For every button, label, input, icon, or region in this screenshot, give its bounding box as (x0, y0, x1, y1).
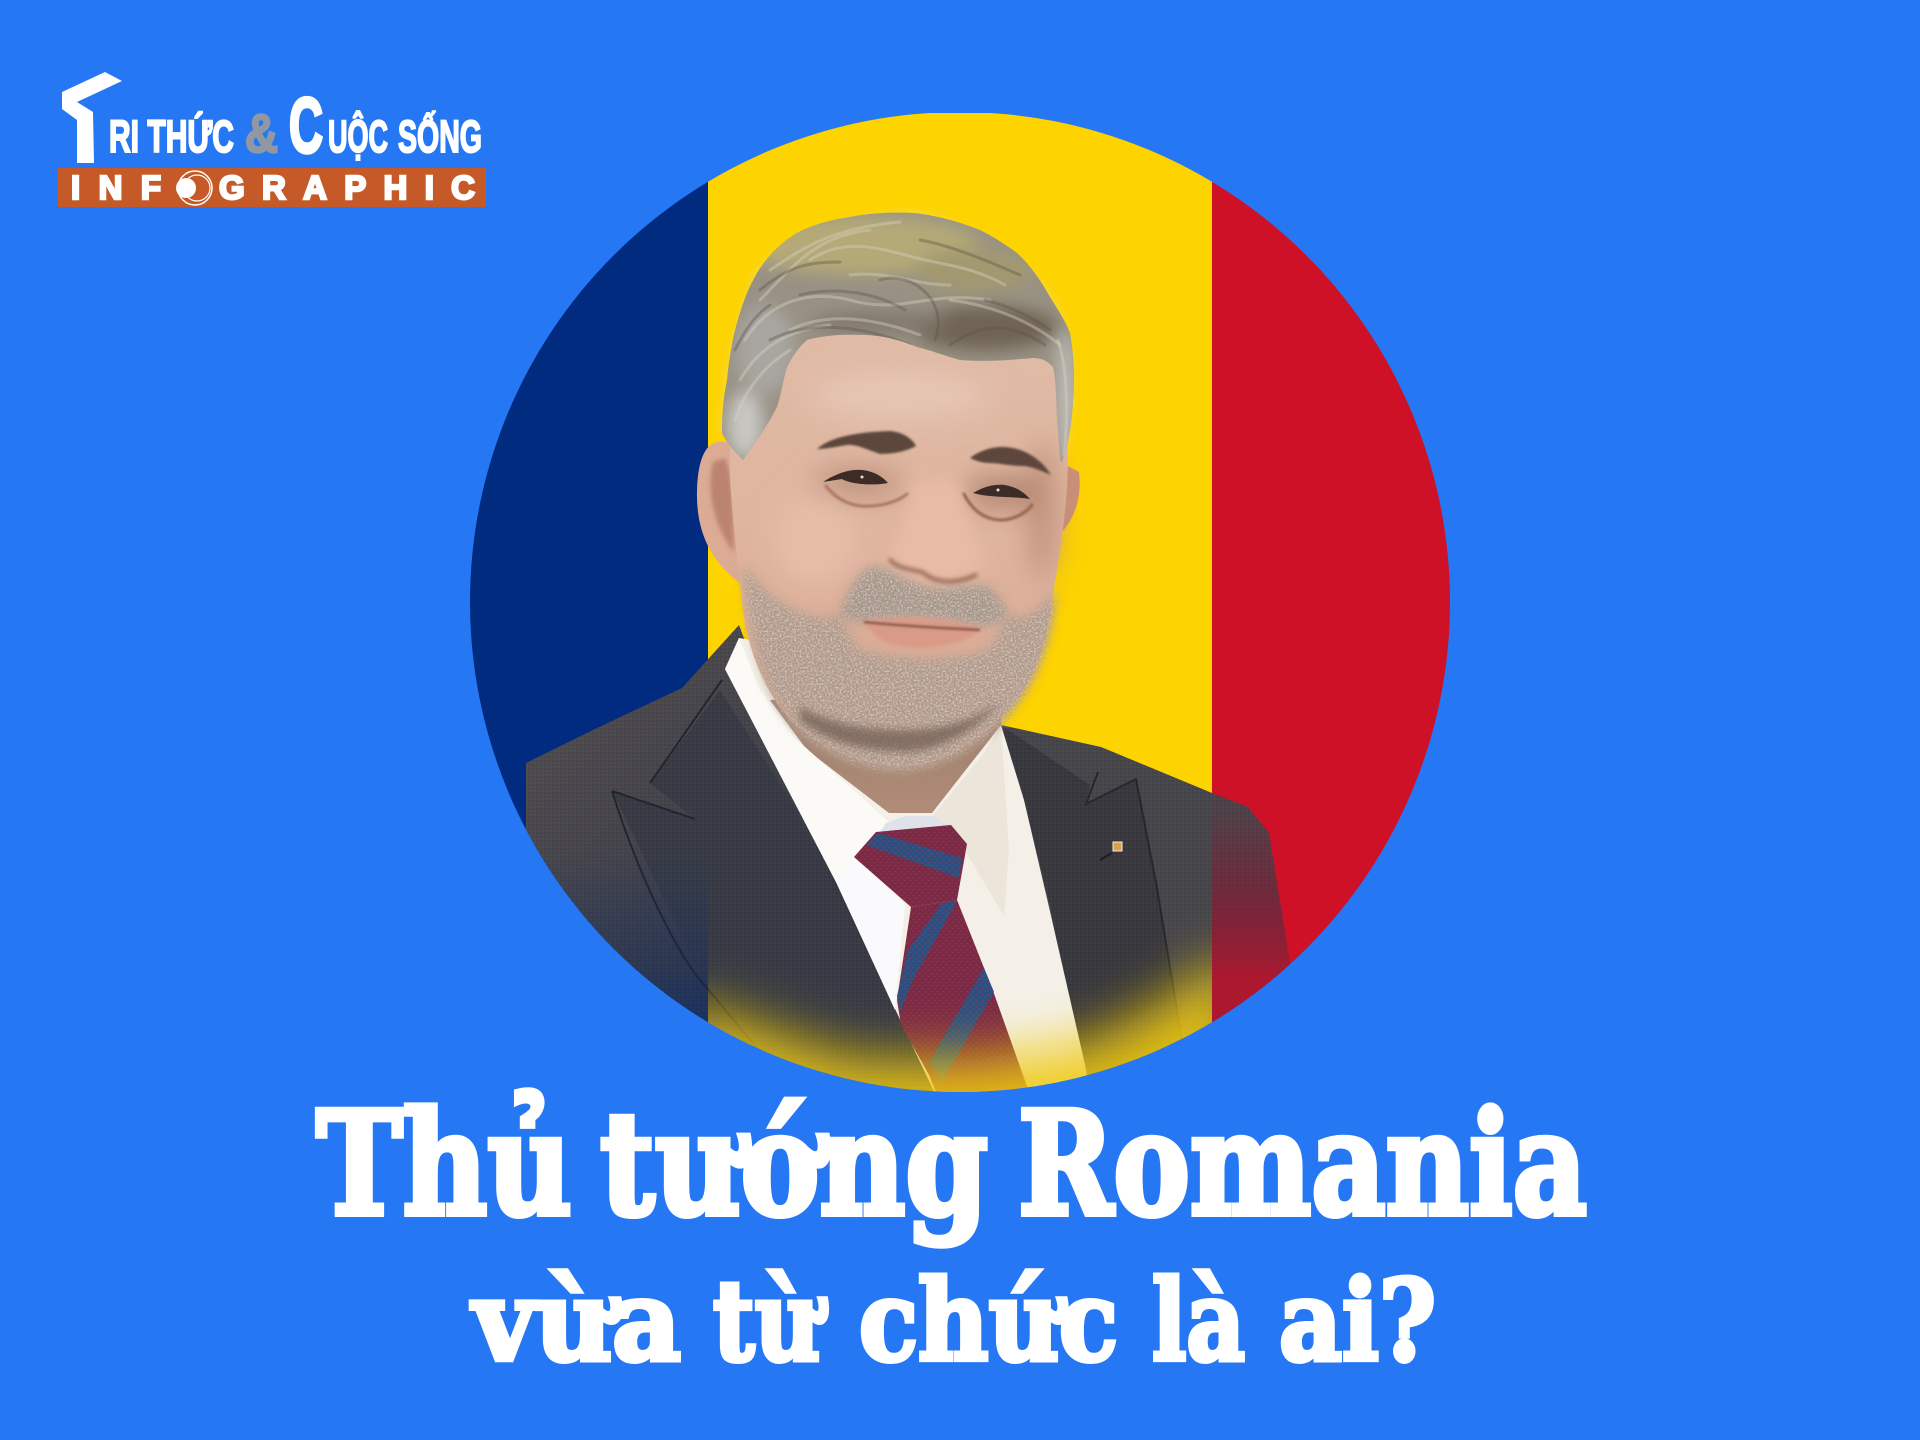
logo bar text: INF (71, 169, 161, 206)
title line 2: chức (859, 1257, 1118, 1387)
jacket (526, 620, 1296, 1100)
left eye (823, 470, 907, 506)
lapel pin (1100, 842, 1122, 860)
right lapel shading (1001, 725, 1190, 1090)
title line 1: tướng (600, 1080, 988, 1248)
title line 2 (471, 1257, 1436, 1387)
logo bar text (71, 169, 475, 206)
logo orange bar (58, 168, 486, 207)
title line 1: Thủ (316, 1080, 572, 1248)
flag stripe: red (1212, 182, 1450, 1022)
shirt collar (725, 638, 1009, 1010)
title line 1 (316, 1080, 1587, 1248)
left ear (696, 442, 740, 584)
logo wordmark: Cuộc Sống (289, 81, 482, 169)
logo bar text: GRAPHIC (219, 169, 475, 206)
right colour fade: red (1212, 797, 1290, 1022)
portrait of the prime minister (526, 205, 1300, 1170)
right eye (964, 485, 1032, 520)
light hair strands (735, 222, 1066, 455)
right brow (970, 447, 1051, 475)
shirt (725, 638, 1090, 1100)
hair tones (727, 215, 1075, 470)
portrait circle with Romanian flag (470, 113, 1450, 1170)
neck (770, 690, 1001, 813)
left brow (817, 431, 916, 454)
logo wordmark: Cuộc Sống: SỐNG (398, 111, 482, 162)
face skin (730, 325, 1068, 767)
flag stripe: yellow (708, 113, 1212, 1093)
beard (743, 566, 1056, 770)
hair halo (722, 213, 1070, 462)
bottom colour fade: blue (570, 889, 708, 1022)
logo ampersand: & (245, 104, 278, 164)
logo: Tri Thức & Cuộc Sống Infographic (58, 72, 486, 207)
title line 1: Romania (1018, 1080, 1587, 1248)
title line 2: là (1152, 1257, 1245, 1387)
mustache (840, 568, 1007, 627)
logo circular O icon (176, 171, 212, 205)
hair (715, 205, 1080, 470)
title line 2: từ (713, 1257, 828, 1387)
head (697, 205, 1080, 770)
necktie (854, 825, 1029, 1092)
logo wordmark: Trí Thức: RI THỨC (109, 111, 234, 162)
right ear (1062, 466, 1080, 532)
mouth (862, 618, 982, 648)
bottom colour fade: yellow (708, 930, 1212, 1092)
title line 2: vừa (471, 1257, 681, 1387)
logo wordmark: Cuộc Sống: C (289, 81, 323, 169)
logo wordmark: Cuộc Sống: UỘC (328, 111, 388, 162)
title line 2: ai? (1279, 1257, 1436, 1387)
left lapel shading (612, 690, 935, 1092)
beard chin shadow (800, 702, 1000, 752)
nose (888, 480, 983, 584)
logo icon: folded T (62, 72, 122, 163)
face shading (775, 371, 1056, 585)
flag stripe: blue (470, 182, 708, 1022)
dark hair strands (735, 240, 1050, 350)
